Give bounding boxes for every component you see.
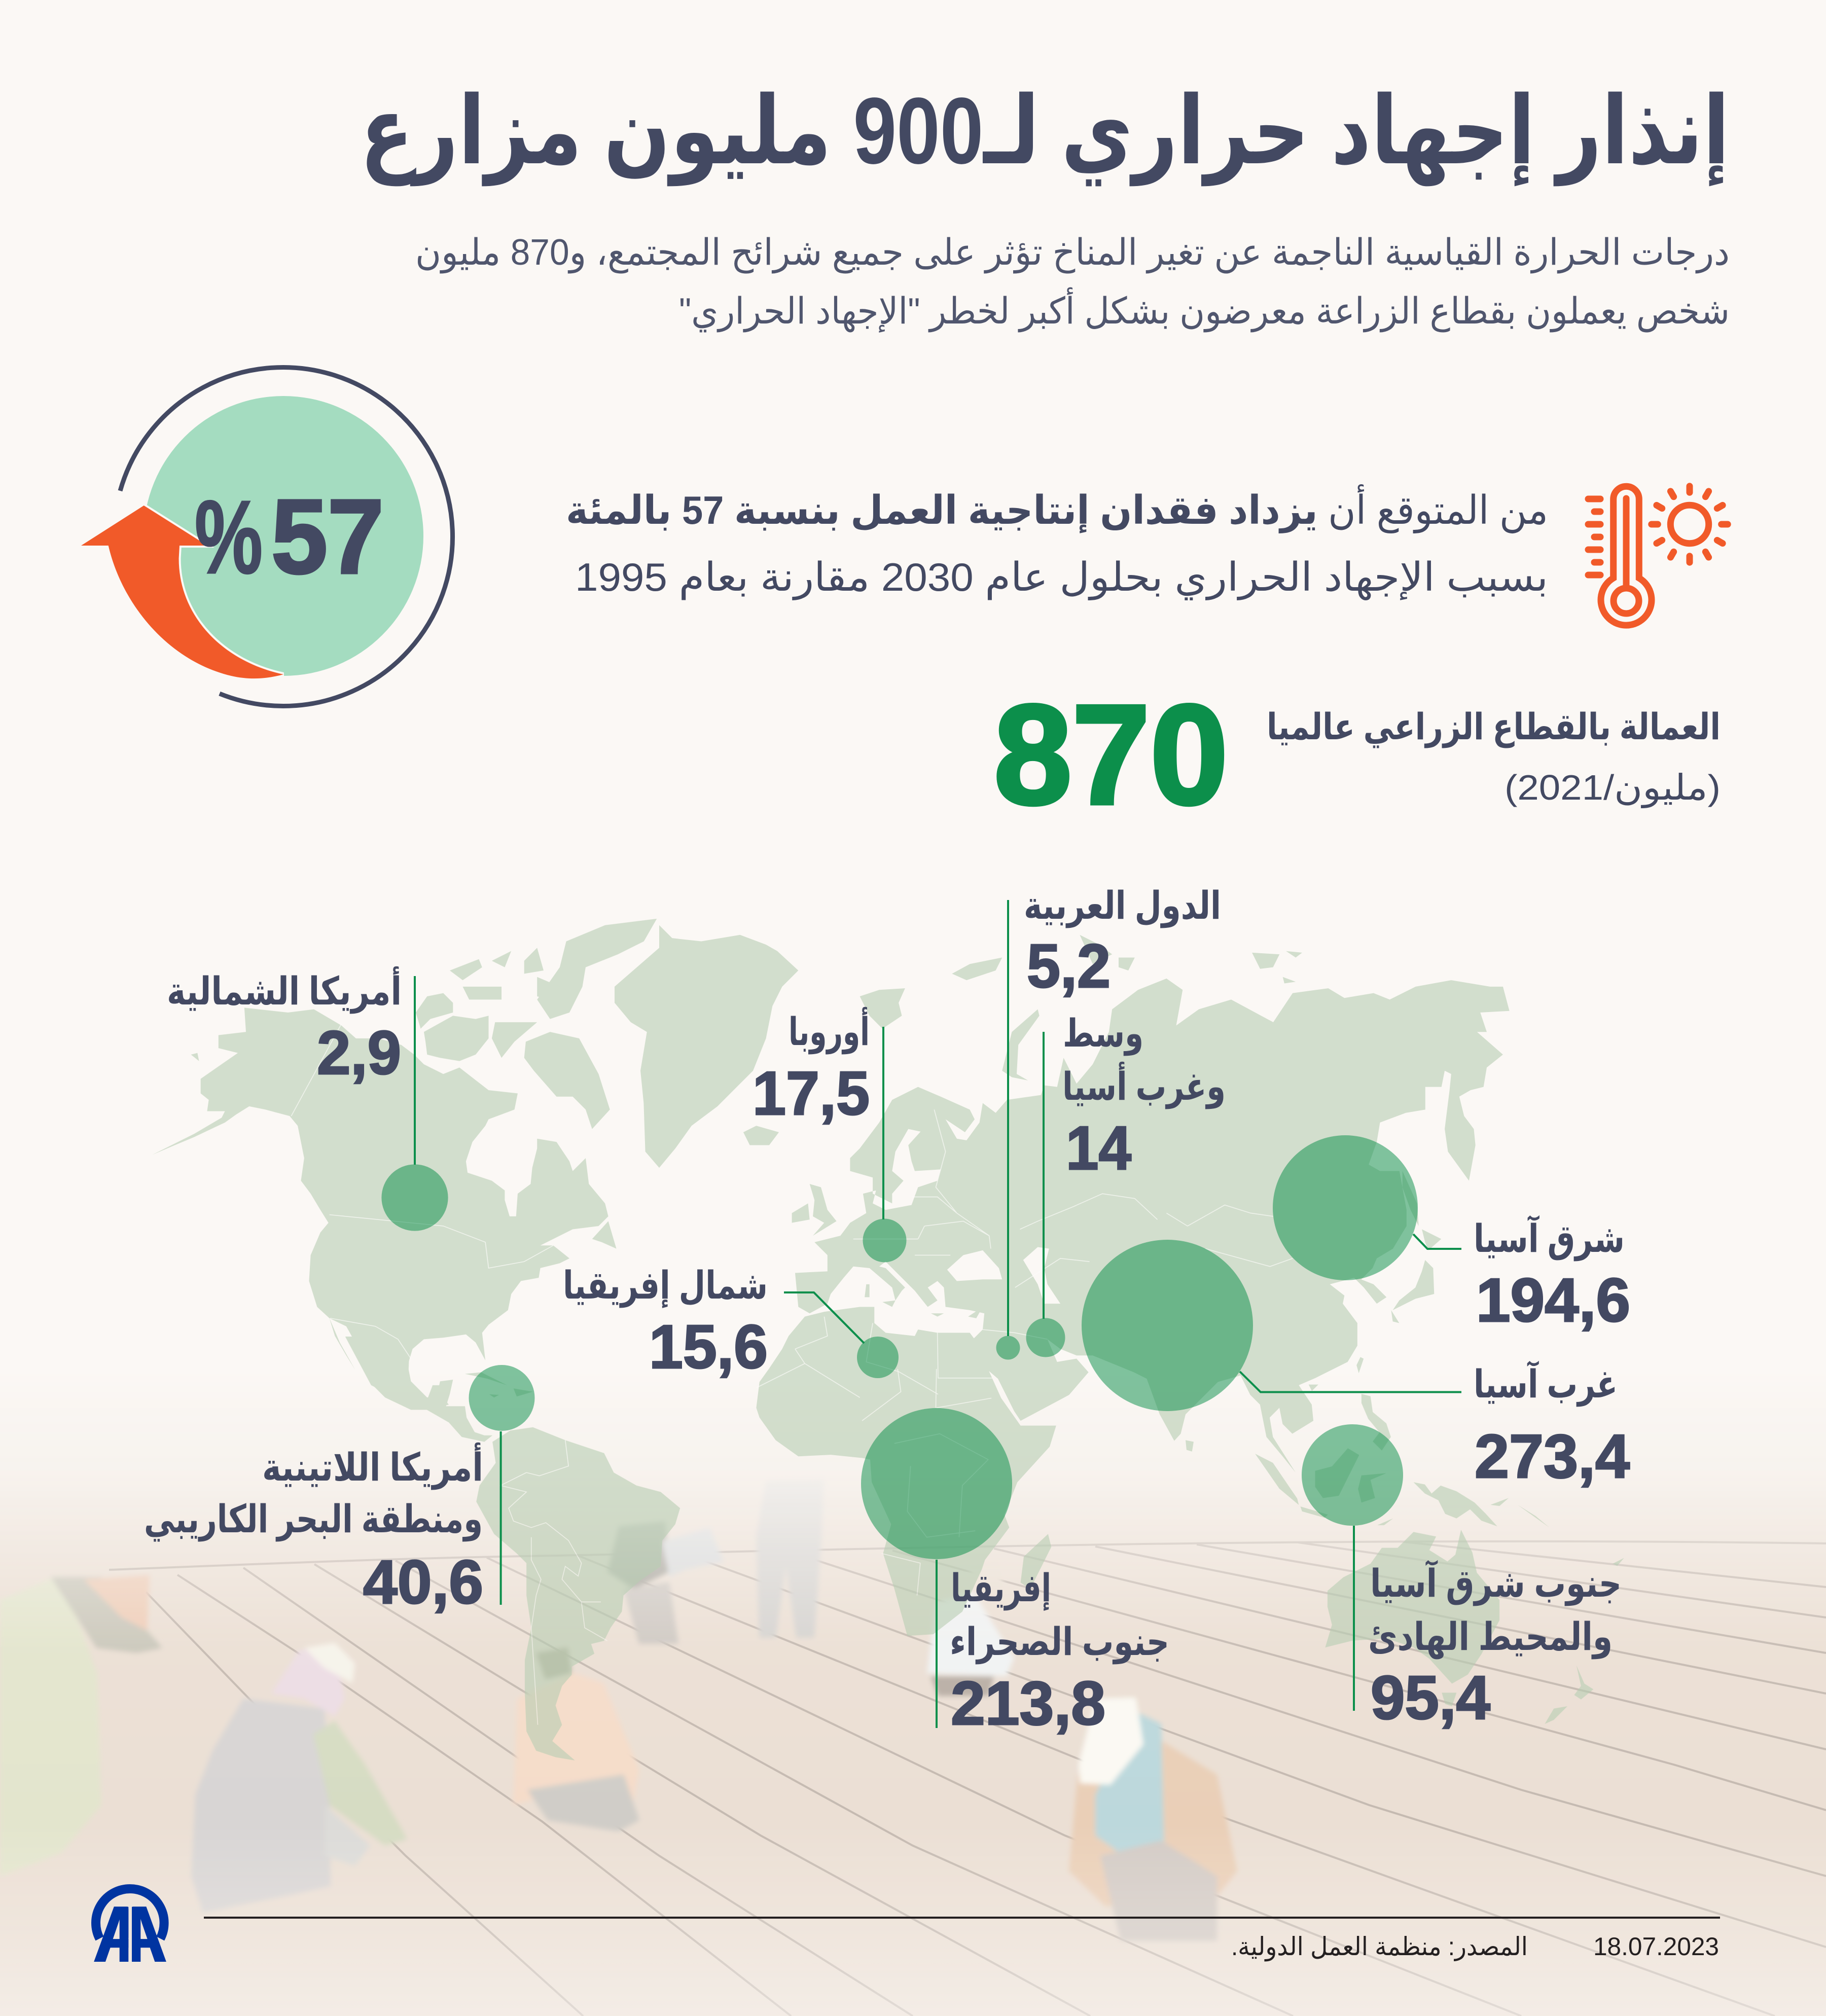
subtitle line 1: درجات الحرارة القياسية الناجمة عن تغير المناخ تؤثر على جميع شرائح المجتمع، و870 مليون <box>415 232 1730 274</box>
icon: thermometer and sun <box>1588 486 1728 625</box>
label: Sub-Saharan Africa: جنوب الصحراء <box>950 1621 1169 1665</box>
circle: Sub-Saharan Africa <box>861 1408 1012 1559</box>
gauge value: 57 <box>271 478 384 596</box>
label: Central and West Asia: وغرب أسيا <box>1062 1061 1226 1109</box>
circle: Europe <box>863 1219 907 1263</box>
subtitle line 2: شخص يعملون بقطاع الزراعة معرضون بشكل أكبر لخطر "الإجهاد الحراري" <box>679 287 1730 333</box>
footer rule <box>204 1917 1720 1919</box>
country borders <box>291 1024 1293 1725</box>
Oceania <box>1315 1394 1624 1724</box>
gauge mint disc <box>144 396 423 676</box>
label: Latin America and Caribbean: 40,6 <box>363 1547 483 1616</box>
label: North Africa <box>563 1264 768 1381</box>
data circles <box>381 1135 1418 1559</box>
label: North America: 2,9 <box>317 1018 401 1087</box>
background photo: farm workers in a field <box>0 1478 1826 2016</box>
AA logo: A <box>92 1890 150 1979</box>
label: Arab states: الدول العربية <box>1024 884 1221 928</box>
gauge value <box>195 478 384 596</box>
label: Sub-Saharan Africa <box>950 1567 1169 1738</box>
AA logo <box>91 1884 169 1962</box>
source: المصدر: منظمة العمل الدولية. <box>1231 1932 1528 1962</box>
label: Arab states <box>1024 884 1221 1000</box>
label: Central and West Asia: وسط <box>1063 1012 1143 1056</box>
Europe, Asia, Africa <box>615 925 1510 1636</box>
orange arrow <box>81 506 283 678</box>
label: Central and West Asia <box>1062 1012 1226 1182</box>
world map <box>152 919 1624 1760</box>
circle: North America <box>381 1164 448 1231</box>
South Asia and Madagascar details <box>1021 1440 1328 1589</box>
key finding line 2: بسبب الإجهاد الحراري بحلول عام 2030 مقارنة بعام 1995 <box>575 555 1548 601</box>
label: Latin America and Caribbean <box>144 1442 483 1616</box>
gauge ring <box>120 367 453 706</box>
label: South Asia: غرب آسيا <box>1474 1360 1618 1407</box>
label: South-East Asia and Pacific: 95,4 <box>1371 1663 1490 1732</box>
AA logo: A <box>111 1890 168 1979</box>
East Asian islands <box>1252 951 1441 1391</box>
label: South Asia <box>1474 1360 1630 1491</box>
label: South Asia: 273,4 <box>1475 1422 1630 1491</box>
label: East Asia <box>1474 1215 1630 1335</box>
label: Arab states: 5,2 <box>1027 931 1111 1000</box>
date: 18.07.2023 <box>1593 1932 1719 1961</box>
label: Latin America and Caribbean: ومنطقة البحر الكاريبي <box>144 1498 483 1542</box>
leader lines <box>415 900 1461 1728</box>
label: South-East Asia and Pacific: والمحيط الهادئ <box>1368 1615 1613 1660</box>
label: Europe: 17,5 <box>753 1059 870 1128</box>
label: Sub-Saharan Africa: إفريقيا <box>951 1567 1051 1611</box>
circle: Latin America <box>469 1365 534 1431</box>
label: South-East Asia and Pacific <box>1368 1560 1622 1732</box>
Central and South America <box>345 1337 680 1760</box>
label: East Asia: 194,6 <box>1476 1266 1630 1335</box>
global employment label: العمالة بالقطاع الزراعي عالميا <box>1267 707 1721 748</box>
label: Europe <box>753 1006 870 1128</box>
percent gauge <box>81 367 453 706</box>
circle: South Asia <box>1082 1240 1253 1411</box>
circle: North Africa <box>857 1337 899 1378</box>
label: North Africa: شمال إفريقيا <box>563 1264 768 1308</box>
circle: South-East Asia <box>1302 1424 1403 1526</box>
gauge value: % <box>195 479 263 595</box>
circle: Central and West Asia <box>1026 1318 1065 1357</box>
label: Sub-Saharan Africa: 213,8 <box>951 1669 1105 1738</box>
unit label: (مليون/2021) <box>1505 768 1721 808</box>
circle: East Asia <box>1273 1135 1418 1280</box>
label: East Asia: شرق آسيا <box>1474 1215 1625 1262</box>
circle: Arab states <box>996 1336 1020 1360</box>
label: South-East Asia and Pacific: جنوب شرق آسيا <box>1370 1560 1622 1606</box>
label: North America <box>167 966 402 1087</box>
label: Europe: أوروبا <box>789 1006 870 1055</box>
label: North Africa: 15,6 <box>649 1312 768 1381</box>
label: North America: أمريكا الشمالية <box>167 966 402 1014</box>
global employment figure: 870 <box>994 676 1228 834</box>
label: Latin America and Caribbean: أمريكا اللاتينية <box>262 1442 483 1490</box>
North America, Greenland side islands <box>152 919 657 1410</box>
key finding line 1: من المتوقع أن يزداد فقدان إنتاجية العمل بنسبة 57 بالمئة <box>566 484 1548 534</box>
label: Central and West Asia: 14 <box>1066 1113 1131 1182</box>
